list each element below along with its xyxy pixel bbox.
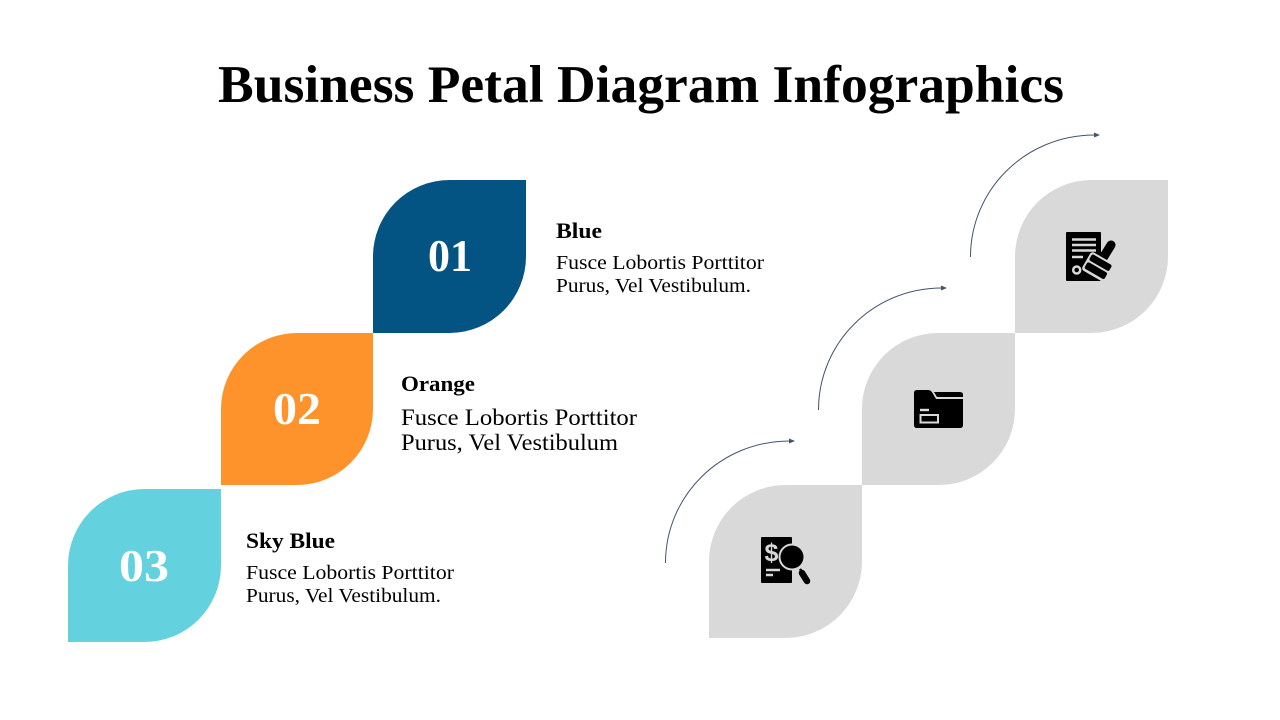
text block: Blue [556, 218, 764, 297]
text block: Orange: Purus, Vel Vestibulum [401, 430, 618, 456]
petal 03: sky blue [68, 489, 221, 642]
text block: Orange: Fusce Lobortis Porttitor [401, 405, 637, 431]
text block: Orange: Orange [401, 371, 475, 396]
title: Business Petal Diagram Infographics [218, 56, 1064, 114]
icon: financial document with magnifier [761, 537, 807, 583]
arrow: top [970, 132, 1100, 257]
icon: folder [914, 390, 963, 428]
text block: Blue: Blue [556, 218, 602, 243]
icon: document with brush [1066, 232, 1115, 283]
text block: Sky Blue: Fusce Lobortis Porttitor [246, 562, 454, 584]
text block: Sky Blue [246, 528, 454, 607]
text block: Sky Blue: Purus, Vel Vestibulum. [246, 585, 441, 607]
icon: financial document with magnifier: $ [765, 539, 779, 567]
text block: Orange [401, 371, 637, 456]
petal 03: sky blue: 03 [119, 540, 169, 591]
petal 02: orange: 02 [273, 383, 321, 434]
text block: Sky Blue: Sky Blue [246, 528, 335, 553]
petal: bottom gray [709, 485, 862, 638]
petal 01: blue [373, 180, 526, 333]
text block: Blue: Purus, Vel Vestibulum. [556, 275, 751, 297]
left column: numbered petals [68, 180, 764, 642]
petal: middle gray [862, 333, 1015, 485]
text block: Blue: Fusce Lobortis Porttitor [556, 252, 764, 274]
petal 02: orange [221, 333, 373, 485]
arrow: middle [818, 286, 947, 410]
petal: top gray [1015, 180, 1168, 333]
right column: icon petals [666, 132, 1168, 638]
arrow: bottom [666, 438, 795, 563]
petal 01: blue: 01 [428, 230, 472, 281]
